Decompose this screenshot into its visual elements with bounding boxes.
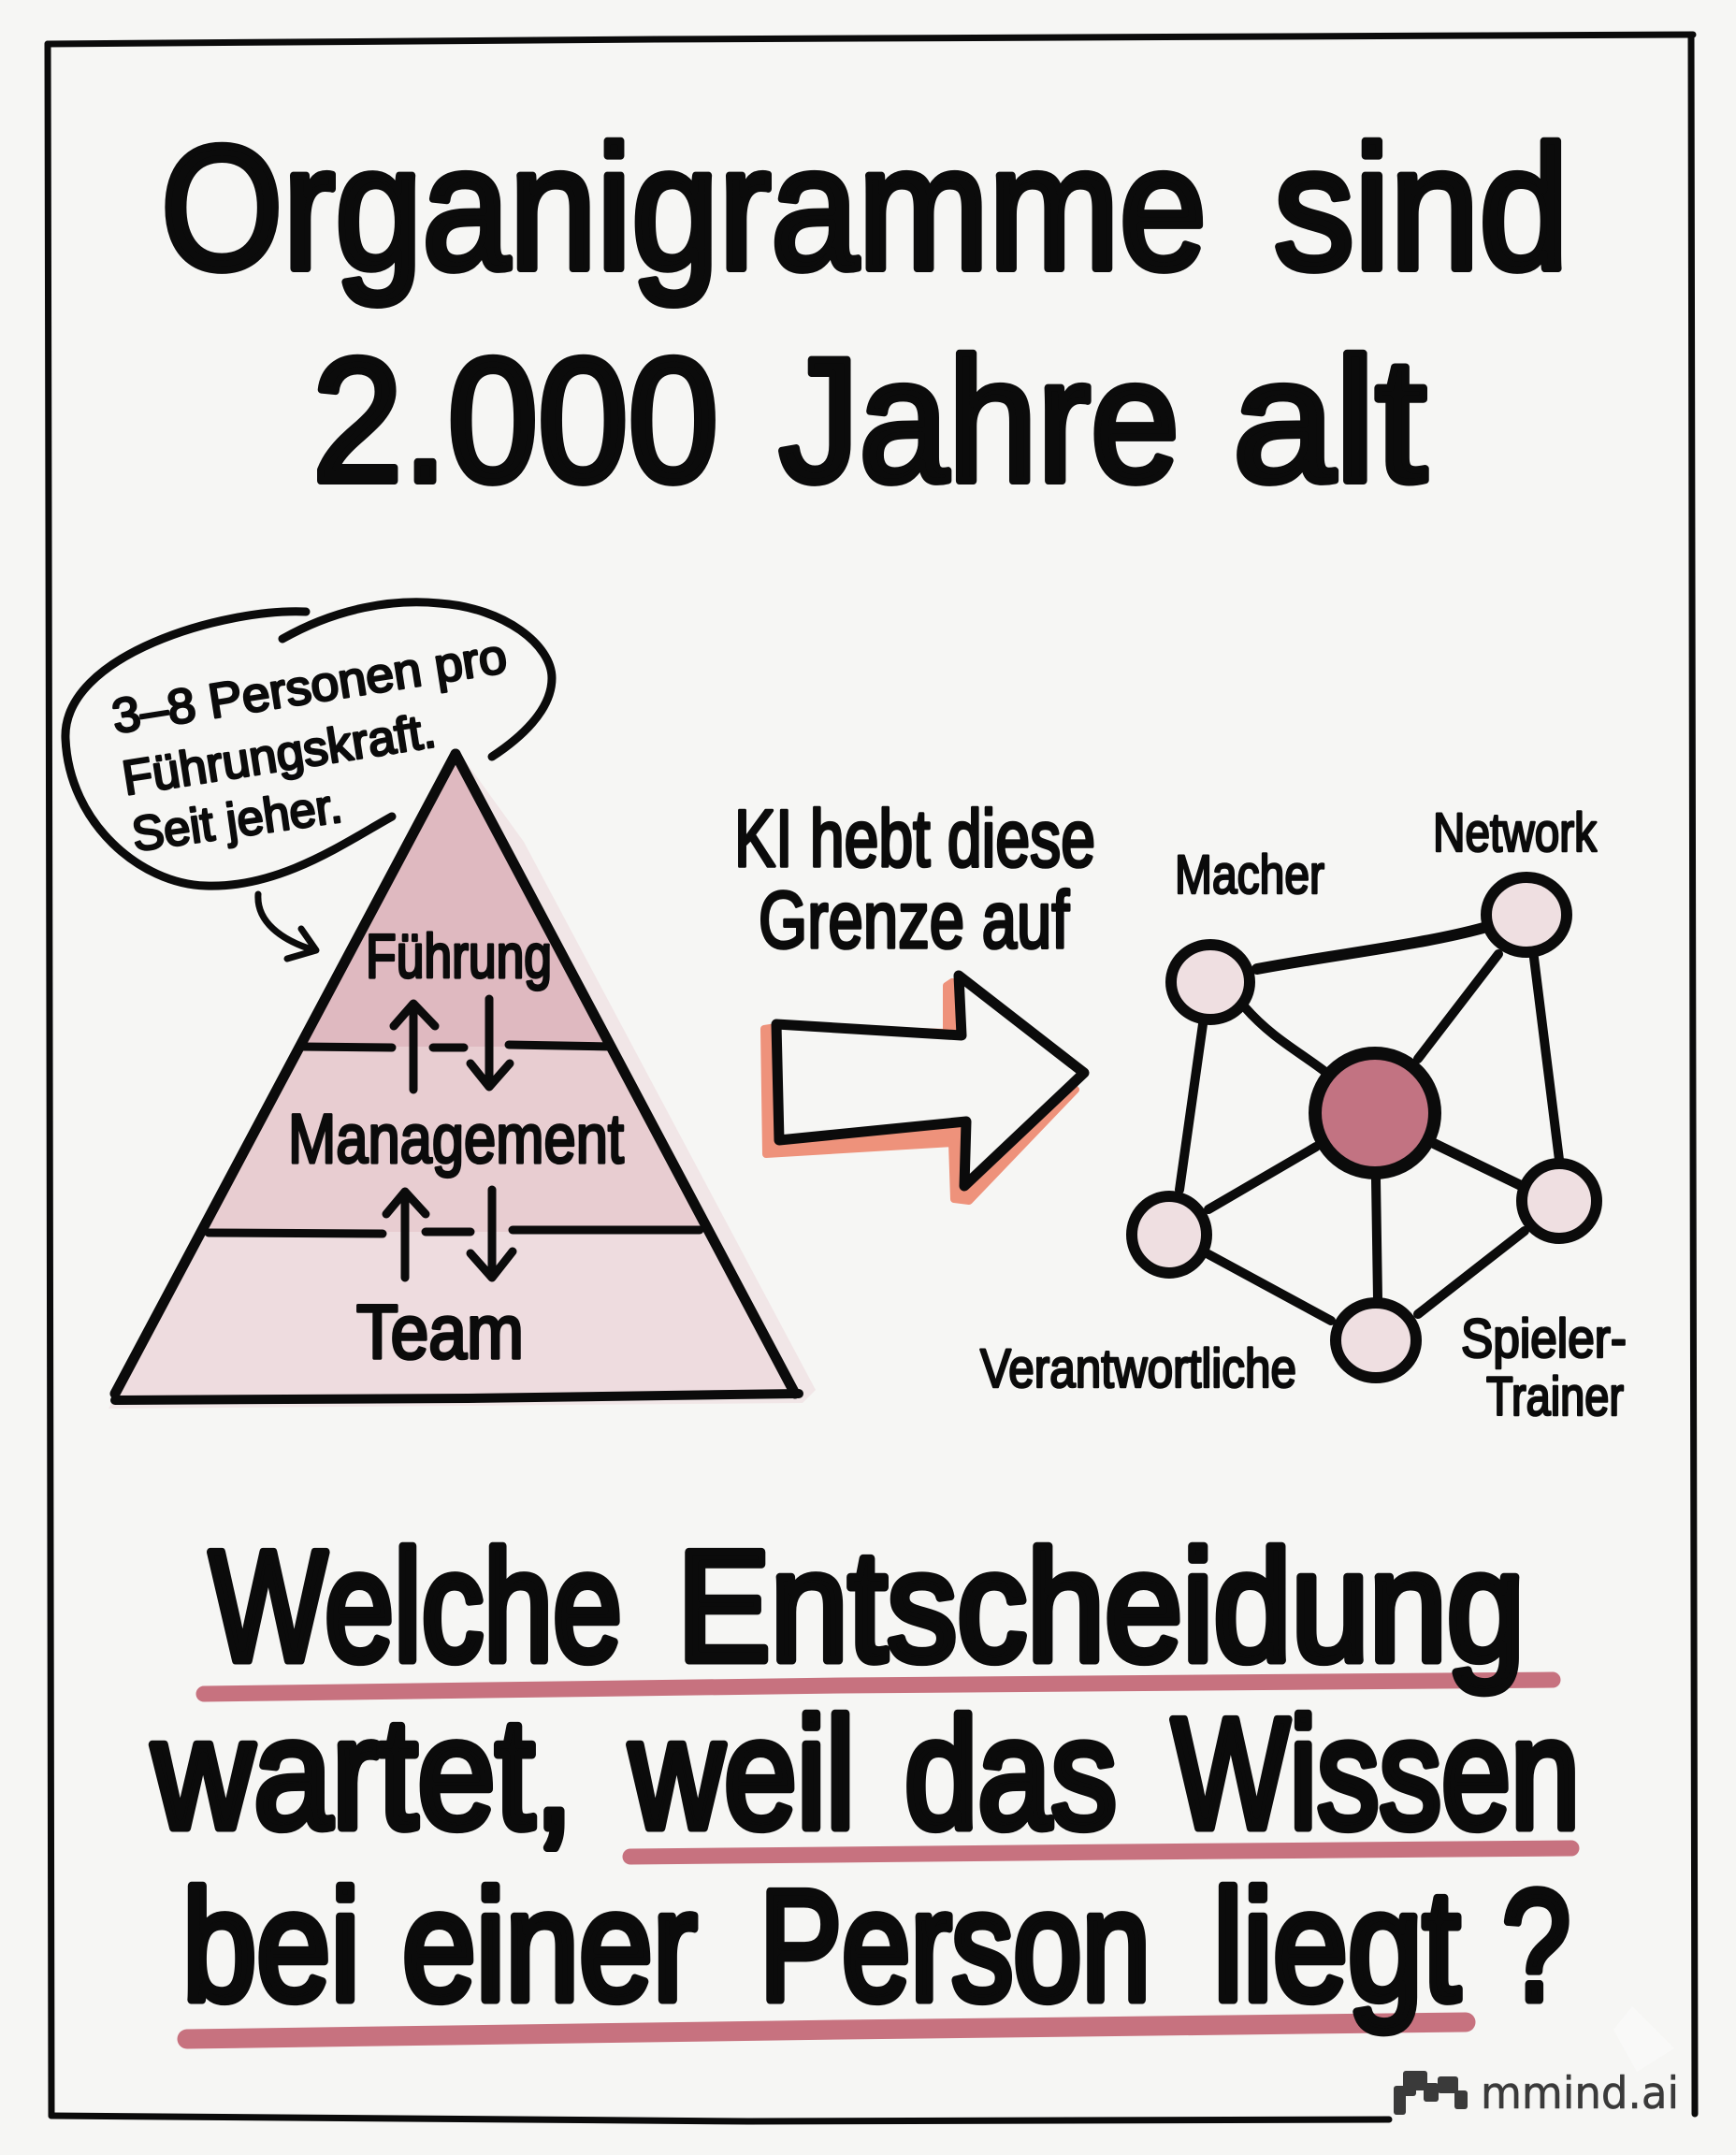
- underline: bei einer Person liegt: [187, 2022, 1466, 2039]
- label: Spieler-Trainer: Spieler-: [1461, 1309, 1627, 1369]
- logo: mmind.ai: [1394, 2068, 1679, 2119]
- pyramid tier: Management: [201, 1047, 711, 1232]
- closing question: einer: [402, 1858, 697, 2033]
- closing question: ?: [1502, 1858, 1570, 2033]
- closing question: weil: [629, 1685, 855, 1861]
- node: Macher: [1171, 945, 1250, 1020]
- network diagram: [980, 803, 1627, 1427]
- closing question: liegt: [1213, 1858, 1460, 2033]
- closing question: Wissen: [1172, 1685, 1580, 1861]
- label: Macher: Macher: [1175, 845, 1324, 905]
- arrows between Management and Team: [386, 1190, 513, 1278]
- closing question: wartet,: [152, 1685, 573, 1861]
- logo wordmark: mmind.ai: [1481, 2068, 1679, 2119]
- underline: weil das Wissen: [630, 1848, 1571, 1857]
- logo icon: [1394, 2071, 1468, 2115]
- node: Network: [1486, 877, 1567, 952]
- title: sind: [1274, 109, 1569, 306]
- title: [161, 109, 1569, 518]
- large arrow with peach shadow: [764, 976, 1084, 1201]
- closing question: Person: [760, 1858, 1150, 2033]
- arrows between Führung and Management: [394, 999, 510, 1090]
- closing question: bei: [182, 1858, 360, 2033]
- label: Verantwortliche: Verantwortliche: [980, 1338, 1296, 1399]
- label: Führung: Führung: [366, 921, 552, 991]
- pyramid tier: Führung: [299, 754, 612, 1047]
- title: alt: [1233, 322, 1426, 518]
- node: Verantwortliche: [1336, 1303, 1416, 1378]
- node: left: [1132, 1196, 1207, 1273]
- label: Spieler-Trainer: Trainer: [1486, 1367, 1624, 1427]
- closing question: das: [904, 1685, 1117, 1861]
- label: Spieler-Trainer: [1461, 1309, 1627, 1427]
- speech bubble with note: [65, 602, 552, 886]
- closing question: [152, 1518, 1580, 2033]
- label: Team: Team: [356, 1290, 524, 1375]
- label: Management: Management: [288, 1100, 624, 1178]
- title: Jahre: [779, 322, 1179, 518]
- arrow: bubble to pyramid: [258, 894, 316, 959]
- caption: KI hebt diese Grenze auf: Grenze auf: [759, 875, 1070, 965]
- node: center: [1315, 1053, 1435, 1173]
- pyramid: [108, 754, 816, 1409]
- speech bubble with note: Führungskraft.: [119, 703, 440, 806]
- underline: Welche Entscheidung: [204, 1680, 1553, 1694]
- title: Organigramme: [161, 109, 1207, 306]
- label: Network: Network: [1433, 803, 1598, 863]
- title: 2.000: [312, 322, 718, 518]
- closing question: Entscheidung: [677, 1518, 1525, 1694]
- pyramid tier: Team: [115, 1232, 798, 1398]
- caption: KI hebt diese Grenze auf: [734, 794, 1095, 965]
- caption: KI hebt diese Grenze auf: KI hebt diese: [734, 794, 1095, 884]
- speech bubble with note: Seit jeher.: [129, 779, 345, 862]
- speech bubble with note: 3–8 Personen pro: [108, 629, 511, 745]
- node: Spieler-Trainer: [1522, 1164, 1597, 1238]
- closing question: Welche: [210, 1518, 622, 1694]
